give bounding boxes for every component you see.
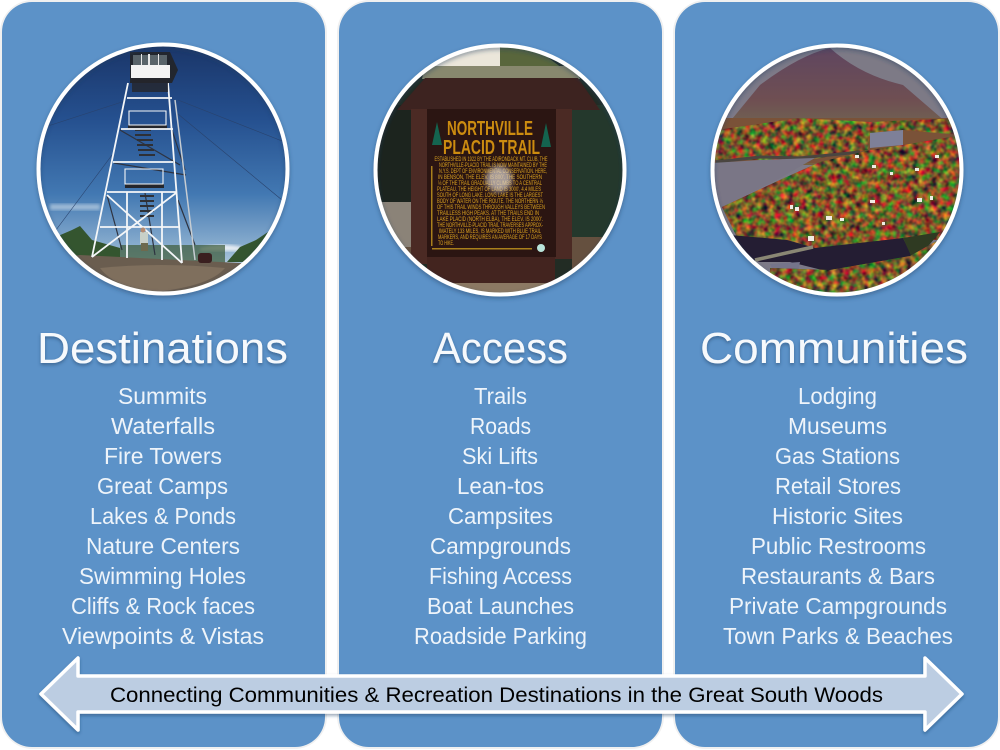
stairs: [135, 130, 155, 216]
list: destinations items: Lakes & Ponds: [90, 503, 236, 529]
list: destinations items: Fire Towers: [104, 443, 222, 469]
near hill: [733, 48, 941, 165]
list: communities items: Museums: [788, 413, 887, 439]
sign body text: SOUTH OF LONG LAKE. LONG LAKE IS THE LARGEST: [437, 192, 543, 199]
sign body text: MARKERS, AND REQUIRES AN AVERAGE OF 17 DAYS: [438, 234, 542, 241]
roof: [397, 78, 600, 110]
photo: Northville Placid Trail sign: [375, 44, 627, 296]
list: access items: Fishing Access: [429, 563, 572, 589]
list: communities items: Public Restrooms: [751, 533, 926, 559]
upper lake: [870, 130, 903, 148]
list: communities items: Gas Stations: [775, 443, 900, 469]
list: access items: Roadside Parking: [414, 623, 587, 649]
list: communities items: Historic Sites: [772, 503, 903, 529]
list: communities items: Town Parks & Beaches: [723, 623, 953, 649]
heading: Access: Access: [433, 324, 568, 373]
list: communities items: [723, 383, 953, 649]
sign body text: TO HIKE.: [438, 240, 454, 247]
sign body text: NORTHVILLE-PLACID TRAIL IS NOW MAINTAINED BY THE: [439, 162, 547, 169]
list: destinations items: Great Camps: [97, 473, 228, 499]
lower lake: [730, 235, 912, 272]
trees on sign: [432, 122, 551, 147]
heading: Destinations: Destinations: [37, 324, 288, 373]
backpack: [198, 253, 212, 263]
hiker: [140, 232, 148, 244]
bridge: [755, 247, 813, 260]
list: communities items: Lodging: [798, 383, 877, 409]
list: destinations items: Waterfalls: [111, 413, 215, 439]
sign body text: LAKE PLACID (NORTH ELBA), THE ELEV. IS 2000'.: [437, 216, 543, 223]
panel: Destinations: [1, 1, 326, 748]
panel: Communities: [674, 1, 999, 748]
sign body text: IMATELY 133 MILES, IS MARKED WITH BLUE TRAIL: [439, 228, 541, 235]
list: access items: Ski Lifts: [462, 443, 538, 469]
sign body text: THE NORTHVILLE-PLACID TRAIL TRAVERSES APPROX-: [437, 222, 543, 229]
far mountain: [835, 46, 962, 110]
sign body text: ESTABLISHED IN 1922 BY THE ADIRONDACK MT. CLUB, THE: [434, 156, 548, 163]
sign body text: TRAILLESS HIGH PEAKS. AT THE TRAILS END IN: [437, 210, 539, 217]
panel: Access: [338, 1, 663, 748]
heading: Communities: Communities: [700, 324, 968, 373]
sign body text: N.Y.S. DEPT OF ENVIRONMENTAL CONSERVATION. HERE,: [439, 168, 547, 175]
list: access items: Campgrounds: [430, 533, 571, 559]
list: access items: Boat Launches: [427, 593, 574, 619]
list: access items: Lean-tos: [457, 473, 544, 499]
list: destinations items: Cliffs & Rock faces: [71, 593, 255, 619]
cab: [130, 52, 178, 83]
list: communities items: Private Campgrounds: [729, 593, 947, 619]
near foliage: [772, 242, 936, 270]
sign body text: BODY OF WATER ON THE ROUTE. THE NORTHERN ⅓: [437, 198, 543, 205]
sign body text: PLATEAU. THE HEIGHT OF LAND IS 3000', 4.4 MILES: [437, 186, 541, 193]
sign board: [427, 109, 556, 257]
white houses: [790, 155, 939, 241]
posts: [411, 109, 427, 264]
arrow caption: Connecting Communities & Recreation Destinations in the Great South Woods: [110, 683, 883, 707]
left lake: [714, 158, 815, 165]
sign title: [444, 121, 540, 154]
list: destinations items: Summits: [118, 383, 207, 409]
platform floors: [125, 125, 167, 188]
list: destinations items: Viewpoints & Vistas: [62, 623, 264, 649]
list: access items: [414, 383, 587, 649]
sign body text: [434, 156, 548, 247]
sign title: PLACID TRAIL: [443, 137, 540, 159]
photo: fire tower on summit: [38, 44, 290, 300]
list: destinations items: Swimming Holes: [79, 563, 246, 589]
list: communities items: Retail Stores: [775, 473, 901, 499]
sign body text: OF THIS TRAIL WINDS THROUGH VALLEYS BETWEEN: [437, 204, 545, 211]
sign body text: ⅓ OF THE TRAIL GRADUALLY CLIMBS TO A CENTRAL: [438, 180, 542, 187]
list: access items: Campsites: [448, 503, 553, 529]
double-headed arrow banner: [41, 658, 962, 730]
list: communities items: Restaurants & Bars: [741, 563, 935, 589]
photo: autumn lakeside town: [712, 44, 965, 295]
list: destinations items: Nature Centers: [86, 533, 240, 559]
sign title: NORTHVILLE: [447, 118, 533, 140]
tower frame: [92, 83, 195, 263]
sign body text: IN BENSON, THE ELEV. IS 800'. THE SOUTHERN: [438, 174, 542, 181]
list: access items: Trails: [474, 383, 527, 409]
list: access items: Roads: [470, 413, 531, 439]
main foliage: [722, 145, 902, 248]
back tower structure: [107, 130, 195, 255]
list: destinations items: [62, 383, 264, 649]
